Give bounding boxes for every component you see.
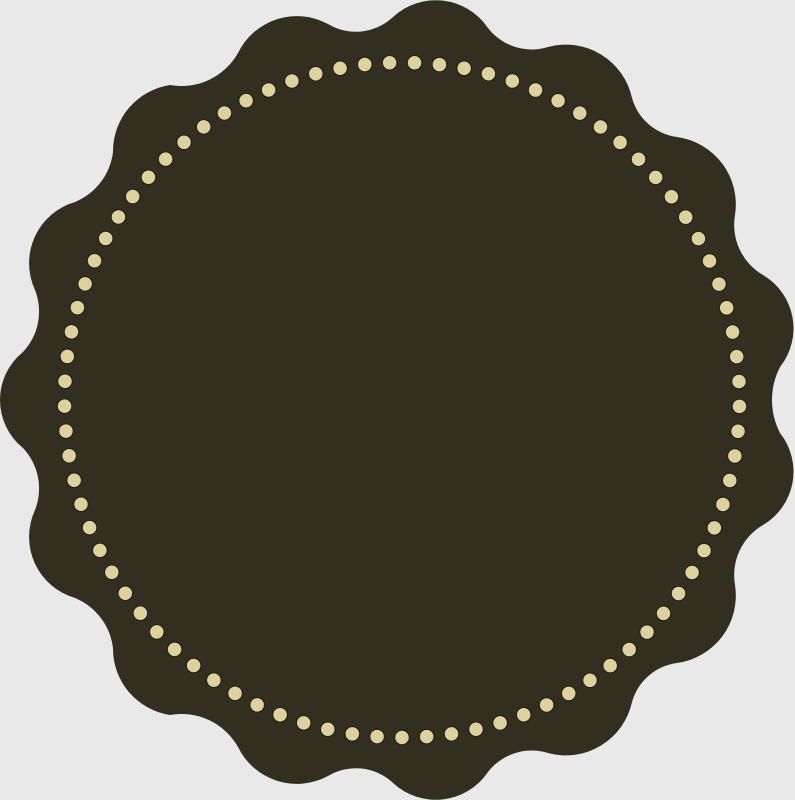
ring of cream dots [64,62,740,738]
